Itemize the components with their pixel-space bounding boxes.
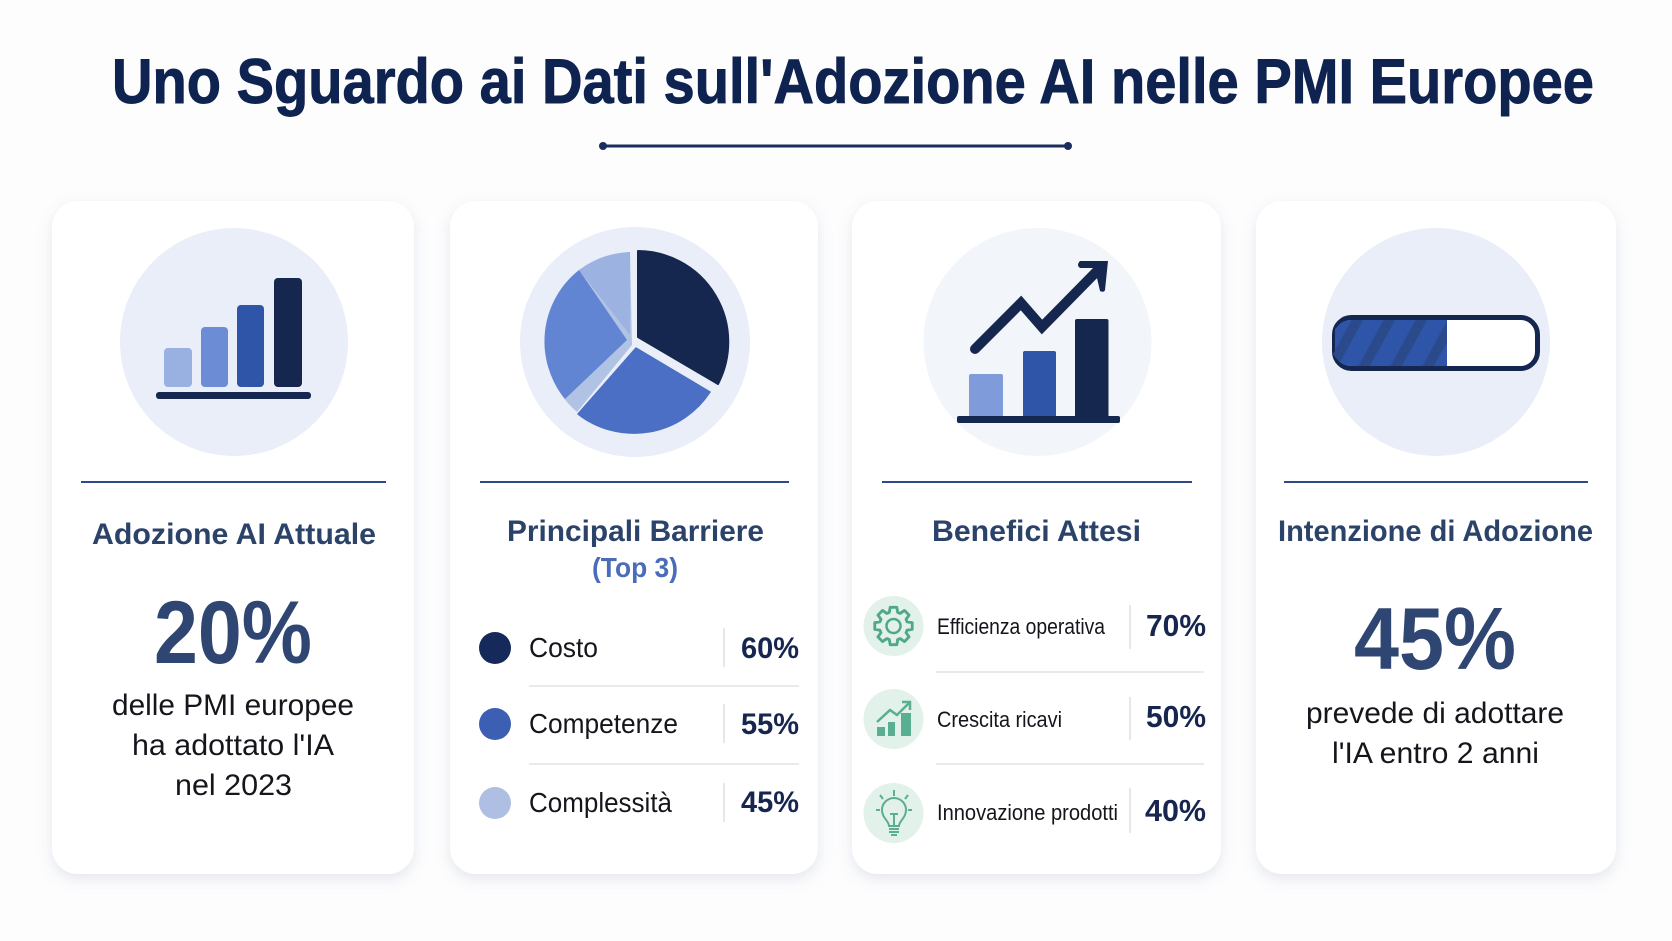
row: competenze: Competenze — [529, 708, 678, 739]
big number: 20% — [154, 582, 312, 682]
row: crescita: 50% — [1146, 699, 1206, 734]
description: ha adottato l'IA — [132, 729, 334, 762]
row: efficienza — [864, 596, 1206, 656]
subheading: (Top 3) — [592, 552, 678, 583]
row: innovazione: Innovazione prodotti — [937, 800, 1118, 825]
row: complessità: 45% — [741, 786, 799, 819]
description: delle PMI europee — [112, 689, 354, 722]
row: costo — [479, 628, 799, 667]
row: crescita: Crescita ricavi — [937, 707, 1062, 732]
description — [112, 689, 354, 802]
heading: Adozione AI Attuale — [92, 518, 376, 551]
big number: 45% — [1354, 589, 1516, 688]
panel: intenzione — [1256, 201, 1616, 874]
row: competenze: 55% — [741, 708, 799, 741]
row: efficienza: 70% — [1146, 608, 1206, 643]
row: crescita — [864, 689, 1206, 749]
heading: Principali Barriere — [507, 515, 764, 548]
description: nel 2023 — [175, 769, 292, 802]
title underline — [599, 142, 1072, 150]
panel: benefici — [852, 201, 1221, 874]
panel: adozione attuale — [52, 201, 414, 874]
row: efficienza: Efficienza operativa — [937, 614, 1106, 639]
icon: growth chart — [924, 228, 1152, 456]
row: complessità — [479, 783, 799, 822]
row: innovazione: 40% — [1145, 793, 1206, 828]
row: innovazione — [864, 783, 1206, 843]
icon: light bulb — [864, 783, 924, 843]
heading: Benefici Attesi — [932, 515, 1141, 548]
icon: gear — [864, 596, 924, 656]
description: prevede di adottare — [1306, 697, 1564, 730]
icon: bar chart — [120, 228, 348, 456]
row: complessità: Complessità — [529, 787, 672, 818]
heading: Intenzione di Adozione — [1278, 515, 1593, 548]
description — [1306, 697, 1564, 770]
icon: mini chart — [864, 689, 924, 749]
row: costo: 60% — [741, 632, 799, 665]
icon: pie chart — [520, 227, 750, 457]
icon: progress bar — [1322, 228, 1550, 456]
panel: barriere — [450, 201, 818, 874]
row: costo: Costo — [529, 632, 598, 663]
description: l'IA entro 2 anni — [1332, 737, 1539, 770]
row: competenze — [479, 704, 799, 743]
